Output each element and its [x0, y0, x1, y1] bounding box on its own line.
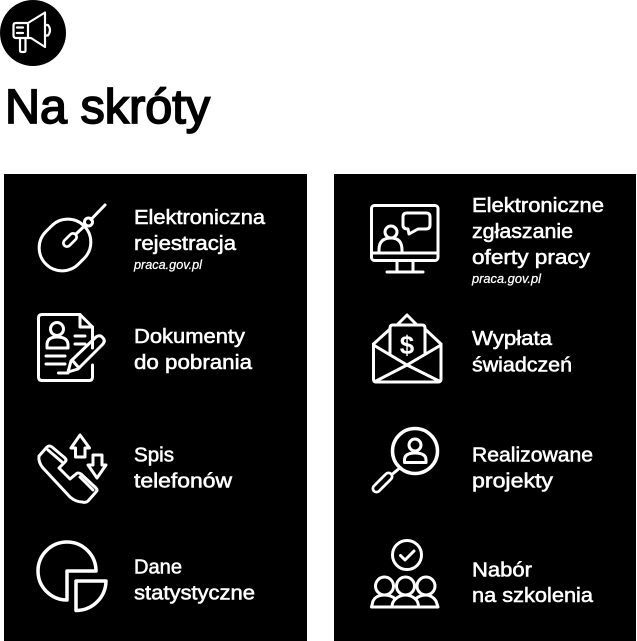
text: Elektroniczna rejestracja: praca.gov.pl [133, 258, 203, 272]
text: Nabór na szkolenia: Nabór [472, 560, 532, 582]
icon: pie chart [38, 542, 106, 611]
icon: envelope with money: $ [400, 330, 415, 360]
icon: megaphone badge [0, 0, 66, 66]
panel: right [334, 174, 636, 641]
text: Elektroniczne zgłaszanie oferty pracy: zgłaszanie [472, 221, 573, 243]
text: Nabór na szkolenia [472, 560, 594, 607]
text: Wypłata świadczeń [472, 328, 572, 376]
text: Elektroniczna rejestracja: Elektroniczna [134, 207, 266, 229]
text: Elektroniczne zgłaszanie oferty pracy: praca.gov.pl [471, 272, 542, 286]
text: Dokumenty do pobrania: Dokumenty [134, 326, 245, 348]
text: Wypłata świadczeń: świadczeń [472, 354, 572, 376]
icon: document with pen [38, 314, 104, 380]
text: Realizowane projekty [472, 444, 593, 492]
text: Spis telefonów: telefonów [134, 470, 233, 492]
text: Elektroniczne zgłaszanie oferty pracy [471, 195, 604, 286]
text: Elektroniczne zgłaszanie oferty pracy: oferty pracy [472, 247, 590, 269]
text: Realizowane projekty: projekty [472, 470, 553, 492]
icon: phone with arrows [39, 435, 106, 502]
icon: envelope with money [374, 315, 441, 382]
text: Spis telefonów [134, 444, 233, 492]
icon: magnifier with person [376, 428, 438, 488]
text: Elektroniczna rejestracja [133, 207, 266, 272]
text: Wypłata świadczeń: Wypłata [472, 328, 553, 350]
text: Dokumenty do pobrania [134, 326, 253, 374]
text: Elektroniczna rejestracja: rejestracja [134, 233, 237, 255]
text: Realizowane projekty: Realizowane [472, 444, 593, 466]
icon: computer mouse [30, 205, 105, 280]
icon: monitor with presenter [372, 206, 438, 272]
text: Elektroniczne zgłaszanie oferty pracy: Elektroniczne [472, 195, 604, 217]
icon: people with check mark [372, 540, 438, 607]
text: Dane statystyczne: Dane [134, 556, 182, 578]
text: Spis telefonów: Spis [134, 444, 174, 466]
text: Dane statystyczne [134, 556, 255, 604]
text: Nabór na szkolenia: na szkolenia [472, 585, 594, 607]
text: Dane statystyczne: statystyczne [134, 582, 255, 604]
text: Dokumenty do pobrania: do pobrania [134, 352, 253, 374]
panel: left [4, 174, 307, 641]
title: Na skróty [5, 81, 210, 134]
